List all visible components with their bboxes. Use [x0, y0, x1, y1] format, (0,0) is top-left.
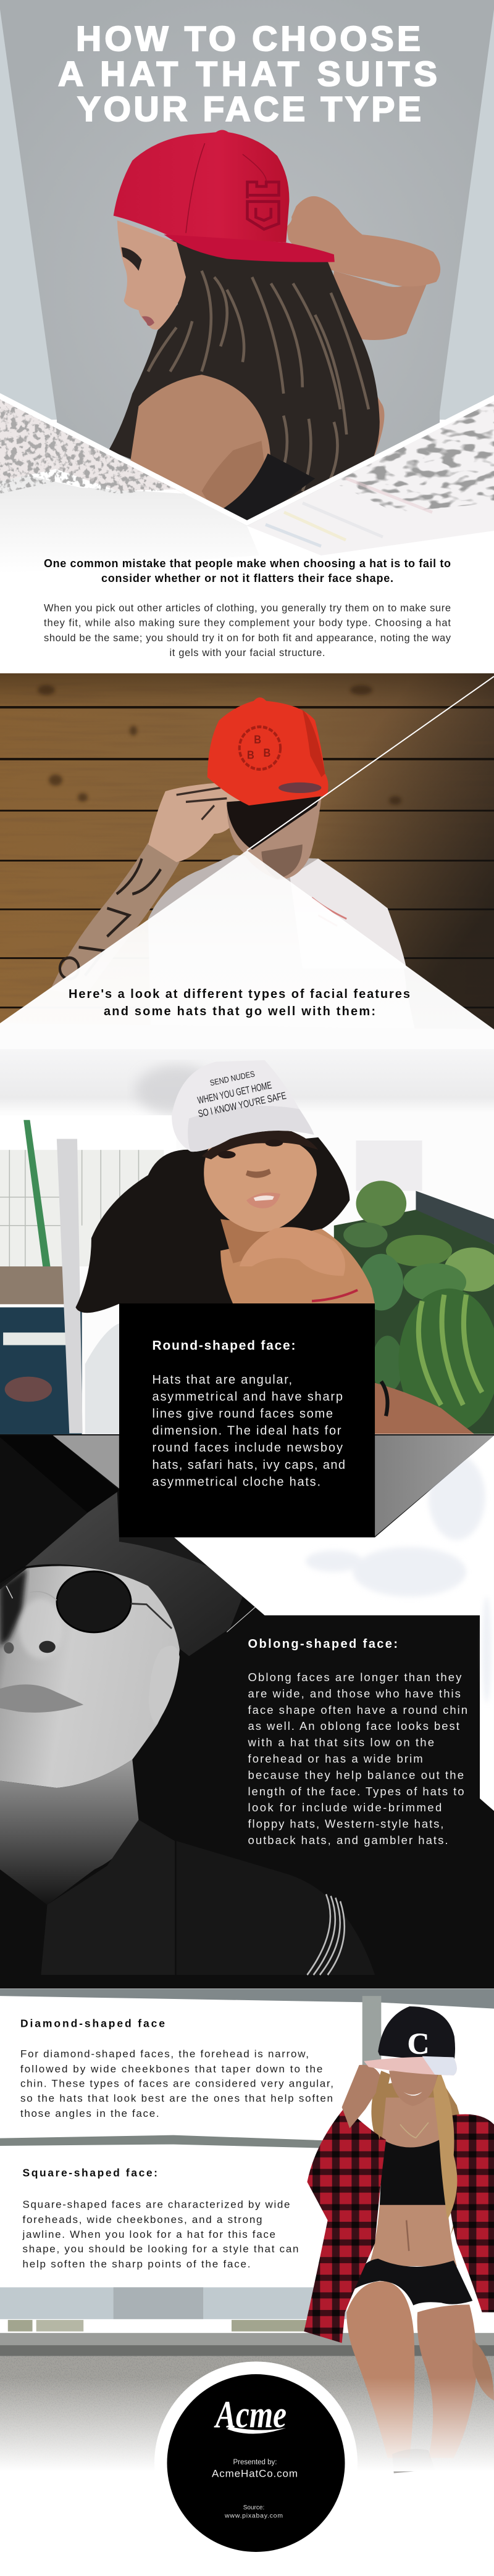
cap slogan: [191, 1063, 287, 1120]
hand: [148, 783, 256, 862]
top left dark facet: [0, 1435, 119, 1513]
top-of-photo haze: [0, 1049, 494, 1114]
intro bold statement: One common mistake that people make when choosing a hat is to fail to: [44, 557, 451, 570]
oblong body text: because they help balance out the: [248, 1768, 464, 1781]
square body text: shape, you should be looking for a style that can: [22, 2243, 299, 2255]
intro white background: [0, 572, 494, 673]
here's a look heading: [69, 987, 410, 1018]
oblong body text: as well. An oblong face looks best: [248, 1719, 459, 1732]
shoulder stripes: [307, 1894, 345, 1975]
oblong body text: face shape often have a round chin: [248, 1703, 467, 1716]
round body text: dimension. The ideal hats for: [152, 1424, 341, 1438]
round body text: asymmetrical and have sharp: [152, 1390, 343, 1404]
face: [0, 1566, 180, 1788]
dark background: [0, 1434, 494, 1988]
white triangle overlay: [0, 850, 494, 1062]
shadow under cap: [227, 795, 321, 850]
vertical pipe: [362, 1996, 381, 2067]
diamond body text: those angles in the face.: [20, 2108, 159, 2119]
round body text: Hats that are angular,: [152, 1373, 292, 1387]
panel: round-shaped face photo: [0, 963, 494, 1434]
diamond body text: For diamond-shaped faces, the forehead is narrow,: [20, 2048, 309, 2060]
fringe: [202, 1126, 318, 1160]
hair highlights: [148, 271, 369, 491]
ledge front: [0, 2345, 494, 2357]
lips: [0, 1684, 83, 1713]
wall: [0, 2287, 346, 2320]
bare back: [129, 375, 270, 523]
title: A HAT THAT SUITS: [58, 54, 437, 94]
intro bold statement: consider whether or not it flatters their face shape.: [101, 572, 393, 584]
oblong body text: look for include wide-brimmed: [248, 1801, 442, 1814]
woman with melons illustration: [0, 1049, 494, 1434]
oblong body text: are wide, and those who have this: [248, 1687, 461, 1700]
round body text: [152, 1373, 345, 1489]
right lower leg: [417, 2304, 477, 2458]
hair: [75, 1137, 350, 1313]
oblong body text: forehead or has a wide brim: [248, 1752, 423, 1765]
forearm on melon: [375, 1383, 474, 1434]
diamond body text: so the hats that look best are the ones that help soften: [20, 2093, 333, 2104]
ledge: [0, 2333, 494, 2346]
square body text: Square-shaped faces are characterized by wide: [22, 2199, 290, 2211]
finger tattoos: [177, 787, 227, 820]
pale streak wash on right: [247, 401, 494, 555]
chevron white band: [0, 393, 494, 526]
left lower leg: [346, 2281, 414, 2458]
jacket folds: [177, 1841, 375, 1975]
shorts: [353, 2259, 472, 2305]
hat crown and brim: [25, 1492, 243, 1656]
jacket collar: [41, 1820, 175, 1975]
panel: diamond and square faces: [0, 1988, 494, 2576]
face: [117, 220, 186, 330]
round body text: lines give round faces some: [152, 1407, 333, 1421]
hand on chin: [240, 1227, 345, 1276]
wood planks: [0, 673, 494, 1056]
blurred backdrop behind cap: [135, 1065, 217, 1115]
oblong body text: outback hats, and gambler hats.: [248, 1834, 448, 1847]
intro body paragraph: [44, 602, 451, 659]
pale paint wash: [0, 469, 259, 574]
panel: hero: [0, 0, 494, 574]
round body text: hats, safari hats, ivy caps, and: [152, 1458, 345, 1472]
diamond body text: chin. These types of faces are considered very angular,: [20, 2077, 333, 2090]
far shoulder and arm: [315, 271, 427, 472]
grey triangle right: [375, 1435, 494, 1536]
man in red cap illustration: [51, 697, 419, 1049]
eyes: [218, 1151, 236, 1158]
black circle: [167, 2374, 345, 2552]
white ring: [154, 2361, 358, 2565]
round body text: asymmetrical cloche hats.: [152, 1475, 320, 1489]
cap crown: [207, 697, 329, 805]
pale marble texture: [306, 1455, 491, 1703]
hair front right: [433, 2071, 457, 2221]
navel shadow: [406, 2221, 409, 2251]
raised hand and forearm: [287, 196, 440, 286]
arm: [51, 842, 180, 997]
nose shadow: [246, 1169, 271, 1178]
nostril: [39, 1641, 56, 1653]
t-shirt light right side: [290, 858, 406, 968]
woman in red cap illustration: [109, 130, 440, 529]
shadow on left temple: [0, 1568, 27, 1646]
black wristband: [381, 1381, 388, 1416]
gap strip: [0, 2319, 346, 2333]
square body text: [22, 2199, 299, 2270]
cap slogan: SEND NUDES: [209, 1069, 256, 1087]
chest and shoulder: [220, 1229, 375, 1304]
hair: [109, 239, 380, 529]
face: [204, 1135, 317, 1232]
website: AcmeHatCo.com: [212, 2468, 298, 2480]
lips: [246, 1192, 280, 1208]
title: HOW TO CHOOSE: [76, 19, 421, 59]
shadowed head: [227, 799, 321, 880]
diamond body text: followed by wide cheekbones that taper down to the: [20, 2063, 322, 2075]
face lower: [389, 2071, 438, 2106]
cap brim white side: [422, 2056, 457, 2075]
torso: [369, 2205, 457, 2266]
right hand: [472, 2339, 494, 2401]
title: YOUR FACE TYPE: [77, 89, 421, 129]
cap emblem: [240, 727, 280, 770]
source url: www.pixabay.com: [224, 2512, 283, 2519]
t-shirt: [148, 855, 419, 1049]
panel: round-shaped face text box: [119, 1303, 375, 1537]
diagonal white line: [247, 676, 494, 850]
nose highlight: [19, 1598, 63, 1658]
cap brim: [164, 235, 335, 262]
cap seams: [186, 143, 266, 233]
grey triangle left: [53, 1435, 119, 1489]
sunglasses: [57, 1571, 131, 1632]
strip details: [8, 2320, 311, 2332]
left texture panel: [0, 399, 494, 574]
red cap crown: [114, 130, 289, 243]
black box: [119, 1303, 375, 1537]
white angular area: [174, 1435, 494, 1811]
tank top: [220, 454, 315, 529]
hero side panels background: [0, 0, 494, 420]
intro body paragraph: they fit, while also making sure they complement your body type. Choosing a hat: [44, 618, 451, 629]
stall mesh: [0, 1150, 164, 1266]
oblong heading: Oblong-shaped face:: [248, 1637, 398, 1651]
cap brim: [364, 2057, 457, 2075]
cap emblem: [248, 182, 279, 229]
intro body paragraph: When you pick out other articles of clothing, you generally try them on to make sure: [44, 602, 451, 613]
top rail: [0, 1988, 494, 2009]
oblong body text: Oblong faces are longer than they: [248, 1671, 462, 1684]
title: [58, 19, 437, 129]
panel: introduction text: [0, 557, 494, 673]
beard: [261, 844, 303, 879]
stall white bar: [0, 1115, 177, 1150]
raised arm: [342, 2065, 383, 2128]
grey speckle left: [0, 399, 176, 494]
plaid shirt right: [444, 2114, 494, 2312]
panel: wood background photo with man: [0, 673, 494, 1062]
cap crown: [378, 2006, 455, 2063]
intro body paragraph: should be the same; you should try it on for both fit and appearance, noting the way: [44, 633, 451, 644]
cap shaded side: [303, 710, 325, 777]
round body text: round faces include newsboy: [152, 1441, 343, 1455]
plaid shirt left: [304, 2107, 386, 2343]
back shading: [202, 441, 268, 523]
neck: [0, 1760, 138, 1905]
shirt: [85, 1323, 120, 1434]
photo background: [0, 1023, 494, 1434]
cap letters: B: [264, 746, 270, 759]
hero grey trapezoid: [0, 0, 494, 525]
tank top: [380, 2140, 447, 2207]
square body text: jawline. When you look for a hat for this face: [22, 2229, 275, 2240]
hair back: [371, 2075, 467, 2235]
oblong body text: floppy hats, Western-style hats,: [248, 1818, 443, 1830]
melon bin rail: [416, 1191, 494, 1244]
source label: Source:: [243, 2504, 264, 2511]
white post: [57, 1139, 83, 1433]
acme logo: Acme: [214, 2394, 287, 2436]
hat band shadow: [119, 1537, 208, 1566]
cap slogan: SO I KNOW YOU'RE SAFE: [197, 1090, 287, 1120]
middle rail: [0, 2135, 328, 2148]
square body text: foreheads, wide cheekbones, and a strong: [22, 2214, 262, 2225]
diamond heading: Diamond-shaped face: [20, 2017, 165, 2029]
cap slogan: WHEN YOU GET HOME: [196, 1080, 273, 1107]
oblong body text: with a hat that sits low on the: [247, 1736, 434, 1749]
white background: [0, 1988, 494, 2576]
white cap: [172, 1060, 314, 1152]
diamond body text: [20, 2048, 333, 2119]
ear: [149, 1646, 180, 1725]
arm tattoos: [60, 858, 161, 979]
letter C on cap: C: [408, 2027, 429, 2060]
round heading: Round-shaped face:: [152, 1339, 295, 1353]
necklace: [400, 2122, 429, 2138]
panel: footer badge: [154, 2361, 358, 2565]
thin white accent line: [227, 1607, 255, 1632]
angular overlays and woman in hat: [0, 1435, 494, 1975]
cap letters: B: [247, 748, 254, 762]
here's a look heading: Here's a look at different types of facial features: [69, 987, 410, 1001]
bottom fade: [0, 2377, 494, 2471]
crates: [0, 1266, 75, 1304]
eye and lip: [121, 247, 142, 271]
right bg sign: [356, 1141, 422, 1191]
wall pillar: [114, 2287, 203, 2320]
background and woman in plaid: [0, 1988, 494, 2474]
intro bold statement: [44, 557, 451, 584]
dark streaks right: [333, 401, 494, 512]
pink grey wash on left: [0, 399, 176, 491]
square heading: Square-shaped face:: [22, 2167, 157, 2179]
cap brim shade: [188, 1106, 314, 1152]
cap letters: [247, 733, 270, 762]
chest and neck: [381, 2098, 444, 2148]
square body text: help soften the sharp points of the face.: [22, 2258, 251, 2270]
oblong body text: [247, 1671, 467, 1847]
intro body paragraph: it gels with your facial structure.: [169, 647, 325, 659]
neck: [220, 1219, 277, 1263]
cap letters: B: [254, 733, 261, 746]
oblong body text: length of the face. Types of hats to: [248, 1785, 464, 1798]
pastel streaks right: [266, 478, 432, 546]
smile: [403, 2092, 422, 2096]
presented by: Presented by:: [233, 2459, 277, 2466]
shoes: [392, 2449, 435, 2474]
brim sticker: [278, 783, 321, 793]
hair front left: [374, 2071, 391, 2140]
white base under chevron: [0, 399, 494, 574]
melons: [334, 1181, 494, 1434]
sunglasses arms: [6, 1586, 172, 1629]
green pole: [23, 1120, 55, 1301]
shirt emblem: [312, 897, 346, 926]
concrete: [0, 2356, 494, 2471]
here's a look heading: and some hats that go well with them:: [104, 1005, 375, 1018]
red bracelet: [312, 1290, 358, 1301]
panel: oblong-shaped face: [0, 1434, 494, 1988]
